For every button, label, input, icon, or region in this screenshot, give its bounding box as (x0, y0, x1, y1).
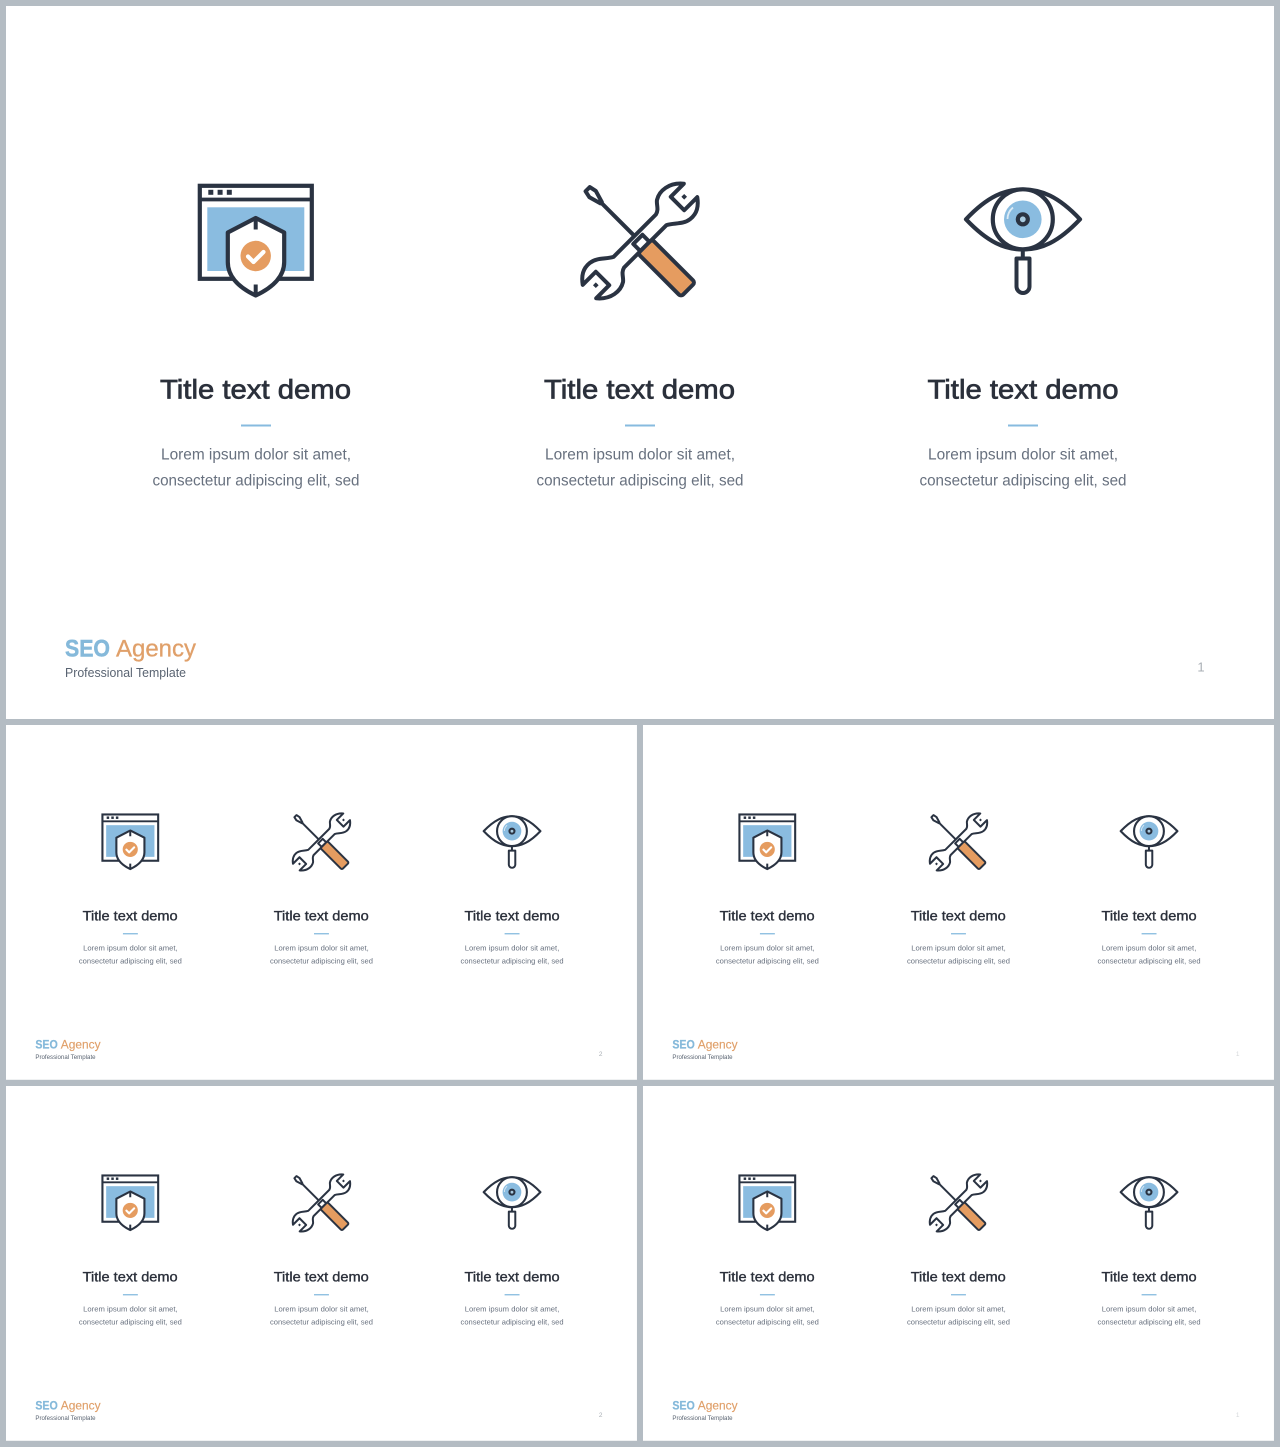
heading: Title text demo (274, 908, 369, 923)
icon: crossed wrench and screwdriver (289, 1171, 354, 1235)
text block: Lorem ipsum dolor sit amet, (274, 1305, 369, 1314)
column 3: eye (920, 189, 1126, 490)
text block: consectetur adipiscing elit, sed (461, 1318, 564, 1327)
text block (270, 944, 373, 966)
heading: Title text demo (911, 1269, 1006, 1284)
text block: Lorem ipsum dolor sit amet, (83, 944, 178, 953)
logo: SEO (672, 1038, 695, 1052)
column 3 (461, 1177, 564, 1327)
heading: Title text demo (544, 374, 735, 404)
logo (672, 1038, 738, 1061)
panel: slide 5 (643, 1086, 1274, 1441)
text block (716, 944, 819, 966)
text block: Lorem ipsum dolor sit amet, (1102, 1305, 1196, 1314)
logo (672, 1399, 738, 1422)
heading: Title text demo (465, 908, 560, 923)
icon: crossed wrench and screwdriver (289, 810, 354, 874)
text block: consectetur adipiscing elit, sed (79, 1318, 182, 1327)
text block (536, 446, 744, 490)
icon: browser window with shield (739, 1175, 795, 1230)
icon: crossed wrench and screwdriver (926, 810, 991, 874)
text block: Lorem ipsum dolor sit amet, (928, 446, 1118, 464)
column 3 (1098, 816, 1201, 966)
logo: SEO (35, 1399, 58, 1413)
column 2 (270, 1171, 373, 1327)
heading: Title text demo (1102, 908, 1197, 923)
text block: Lorem ipsum dolor sit amet, (911, 944, 1006, 953)
icon: browser window with shield (739, 814, 795, 869)
page number: 1 (1236, 1051, 1240, 1058)
heading: Title text demo (928, 374, 1118, 404)
text block: Lorem ipsum dolor sit amet, (720, 1305, 815, 1314)
heading: Title text demo (465, 1269, 560, 1284)
text block (461, 944, 564, 966)
text block (907, 1305, 1010, 1327)
logo: Professional Template (672, 1415, 733, 1422)
text block: consectetur adipiscing elit, sed (716, 957, 819, 966)
logo: Professional Template (65, 666, 186, 680)
text block: Lorem ipsum dolor sit amet, (83, 1305, 178, 1314)
icon: eye with magnifier (484, 1177, 540, 1229)
column 1 (716, 1175, 819, 1327)
column 2 (907, 1171, 1010, 1327)
icon: browser window with shield (102, 1175, 158, 1230)
column 1 (79, 814, 182, 966)
icon: eye with magnifier (484, 816, 540, 868)
logo: Professional Template (672, 1054, 733, 1061)
text block (152, 446, 360, 490)
column 1 (716, 814, 819, 966)
text block: consectetur adipiscing elit, sed (79, 957, 182, 966)
text block: consectetur adipiscing elit, sed (152, 472, 360, 490)
logo: SEO (35, 1038, 58, 1052)
text block: Lorem ipsum dolor sit amet, (545, 446, 735, 464)
column 2 (270, 810, 373, 966)
text block (461, 1305, 564, 1327)
page number: 1 (1197, 660, 1205, 674)
panel: slide 2 (6, 725, 637, 1080)
text block: consectetur adipiscing elit, sed (907, 957, 1010, 966)
heading: Title text demo (274, 1269, 369, 1284)
heading: Title text demo (83, 1269, 178, 1284)
column 1 (79, 1175, 182, 1327)
text block: consectetur adipiscing elit, sed (270, 1318, 373, 1327)
text block: consectetur adipiscing elit, sed (461, 957, 564, 966)
text block (716, 1305, 819, 1327)
column 1: browser security (152, 186, 360, 490)
heading: Title text demo (1102, 1269, 1197, 1284)
panel: main slide (6, 6, 1274, 719)
icon: eye with magnifier (1121, 816, 1177, 868)
column 3 (461, 816, 564, 966)
logo (35, 1038, 101, 1061)
column 2 (907, 810, 1010, 966)
logo: SEO (65, 636, 110, 662)
heading: Title text demo (720, 908, 815, 923)
heading: Title text demo (720, 1269, 815, 1284)
icon: eye with magnifier (966, 189, 1080, 293)
column 3 (1098, 1177, 1201, 1327)
text block (1098, 1305, 1201, 1327)
icon: browser window with shield (200, 186, 312, 296)
text block: consectetur adipiscing elit, sed (716, 1318, 819, 1327)
text block (907, 944, 1010, 966)
text block: Lorem ipsum dolor sit amet, (161, 446, 351, 464)
text block (79, 944, 182, 966)
text block: Lorem ipsum dolor sit amet, (465, 1305, 559, 1314)
logo: Agency (698, 1038, 738, 1052)
icon: crossed wrench and screwdriver (926, 1171, 991, 1235)
text block (920, 446, 1126, 490)
page number: 1 (1236, 1412, 1240, 1419)
text block: consectetur adipiscing elit, sed (920, 472, 1126, 490)
column 2: tools (536, 176, 744, 490)
text block (79, 1305, 182, 1327)
heading: Title text demo (911, 908, 1006, 923)
text block: consectetur adipiscing elit, sed (907, 1318, 1010, 1327)
text block: consectetur adipiscing elit, sed (270, 957, 373, 966)
logo: Agency (116, 636, 197, 662)
heading: Title text demo (83, 908, 178, 923)
logo: Agency (698, 1399, 738, 1413)
logo: Professional Template (35, 1415, 96, 1422)
text block: Lorem ipsum dolor sit amet, (465, 944, 559, 953)
text block (270, 1305, 373, 1327)
text block: Lorem ipsum dolor sit amet, (911, 1305, 1006, 1314)
text block: consectetur adipiscing elit, sed (1098, 1318, 1201, 1327)
text block: consectetur adipiscing elit, sed (1098, 957, 1201, 966)
logo (65, 636, 197, 680)
panel: slide 3 (643, 725, 1274, 1080)
text block: consectetur adipiscing elit, sed (536, 472, 744, 490)
page number: 2 (599, 1412, 603, 1419)
logo: SEO (672, 1399, 695, 1413)
icon: browser window with shield (102, 814, 158, 869)
logo: Agency (61, 1038, 101, 1052)
text block: Lorem ipsum dolor sit amet, (1102, 944, 1196, 953)
panel: slide 4 (6, 1086, 637, 1441)
icon: crossed wrench and screwdriver (575, 176, 705, 306)
text block (1098, 944, 1201, 966)
icon: eye with magnifier (1121, 1177, 1177, 1229)
text block: Lorem ipsum dolor sit amet, (720, 944, 815, 953)
page number: 2 (599, 1051, 603, 1058)
logo (35, 1399, 101, 1422)
heading: Title text demo (160, 374, 351, 404)
logo: Agency (61, 1399, 101, 1413)
logo: Professional Template (35, 1054, 96, 1061)
text block: Lorem ipsum dolor sit amet, (274, 944, 369, 953)
